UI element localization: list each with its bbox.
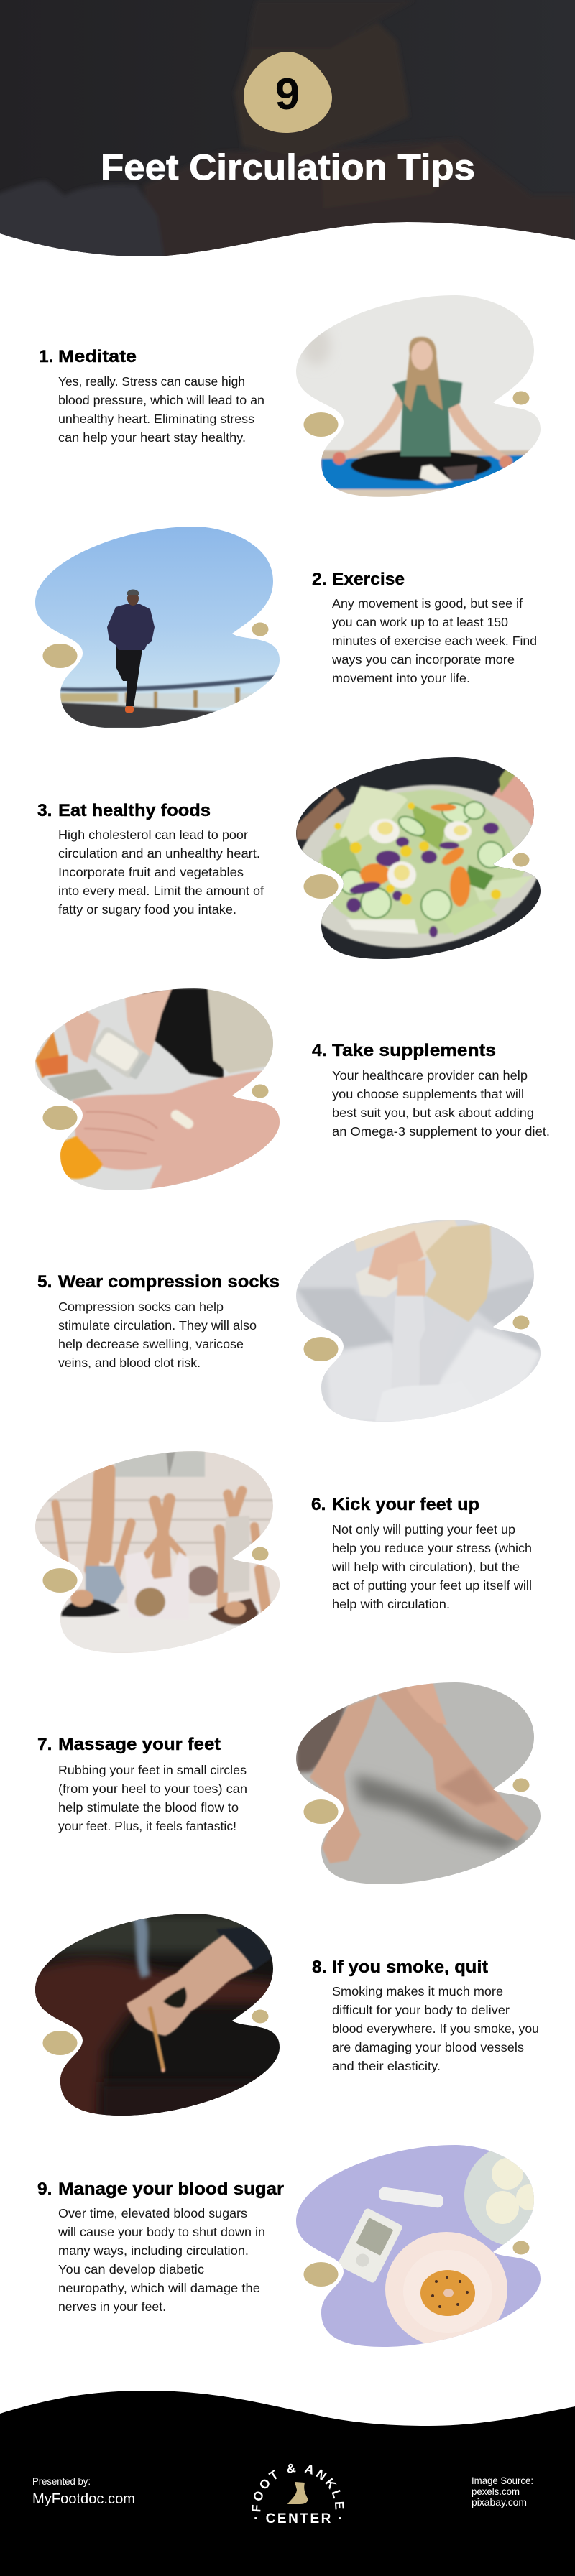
text block xyxy=(58,2206,265,2314)
heading: Massage your feet xyxy=(58,1735,221,1754)
text block: can help your heart stay healthy. xyxy=(58,430,246,445)
header photo: hands massaging a foot xyxy=(0,0,575,266)
text block: into every meal. Limit the amount of xyxy=(58,884,264,898)
text block: an Omega-3 supplement to your diet. xyxy=(332,1124,550,1139)
heading: 1. xyxy=(39,347,53,366)
logo: foot and ankle center: · CENTER · xyxy=(254,2511,343,2526)
text block xyxy=(332,1984,539,2073)
footer xyxy=(0,2391,575,2576)
text block: stimulate circulation. They will also xyxy=(58,1318,257,1333)
text block: you choose supplements that will xyxy=(332,1087,524,1101)
tan blob accents xyxy=(43,1547,269,1593)
header banner xyxy=(0,0,575,266)
panel: tip 7 massage your feet xyxy=(37,1682,540,1884)
panel: tip 5 wear compression socks xyxy=(37,1220,540,1422)
text block: You can develop diabetic xyxy=(58,2262,204,2276)
text block: help stimulate the blood flow to xyxy=(58,1800,239,1815)
text block: you can work up to at least 150 xyxy=(332,615,508,629)
text block: fatty or sugary food you intake. xyxy=(58,902,236,917)
heading: 8. xyxy=(312,1958,326,1977)
photo: socks on a bed xyxy=(296,1220,540,1422)
text block: best suit you, but ask about adding xyxy=(332,1106,534,1120)
presented by xyxy=(32,2476,135,2507)
heading: Take supplements xyxy=(332,1041,496,1060)
presented by: Presented by: xyxy=(32,2476,91,2487)
text block: help you reduce your stress (which xyxy=(332,1541,532,1555)
text block: Not only will putting your feet up xyxy=(332,1522,515,1537)
tan blob accents xyxy=(303,853,529,899)
image source: pixabay.com xyxy=(472,2497,527,2508)
tan blob accents xyxy=(43,2010,269,2055)
logo: foot and ankle center: FOOT & ANKLE xyxy=(252,2464,344,2511)
text block: many ways, including circulation. xyxy=(58,2243,249,2258)
heading: Eat healthy foods xyxy=(58,801,211,820)
text block xyxy=(58,374,264,445)
panel: tip 9 manage your blood sugar xyxy=(37,2144,566,2347)
text block: Incorporate fruit and vegetables xyxy=(58,865,244,879)
badge: number 9 xyxy=(244,52,332,133)
text block: Yes, really. Stress can cause high xyxy=(58,374,245,389)
text block: help decrease swelling, varicose xyxy=(58,1337,244,1351)
tan blob accents xyxy=(303,391,529,437)
photo: salad plate xyxy=(296,757,540,959)
text block xyxy=(58,1299,257,1370)
text block xyxy=(331,596,537,685)
photo: hand holding a cigarette xyxy=(28,1914,280,2122)
heading: 7. xyxy=(37,1735,52,1754)
text block xyxy=(331,1522,532,1611)
image source: Image Source: xyxy=(472,2475,533,2486)
photo: woman meditating xyxy=(296,295,540,497)
text block: help with circulation. xyxy=(332,1597,450,1611)
tan blob accents xyxy=(303,2241,529,2287)
presented by: MyFootdoc.com xyxy=(32,2491,135,2507)
panel: tip 4 take supplements xyxy=(35,988,550,1190)
image source xyxy=(472,2475,533,2508)
footer background wave xyxy=(0,2391,575,2576)
text block: Over time, elevated blood sugars xyxy=(58,2206,247,2220)
panel: tip 3 eat healthy foods xyxy=(37,757,552,963)
heading: 3. xyxy=(37,801,52,820)
heading: Meditate xyxy=(58,347,137,366)
photo: three women with legs up xyxy=(35,1451,280,1653)
heading: 5. xyxy=(37,1272,52,1292)
text block: will help with circulation), but the xyxy=(331,1560,520,1574)
photo: pill in an open hand xyxy=(35,988,283,1190)
heading: Kick your feet up xyxy=(332,1495,479,1514)
panel: tip 6 kick your feet up xyxy=(35,1451,532,1653)
text block xyxy=(332,1068,550,1139)
photo: bare feet on grey floor xyxy=(296,1682,540,1884)
heading: 6. xyxy=(311,1495,326,1514)
icon: foot xyxy=(288,2482,308,2504)
text block: minutes of exercise each week. Find xyxy=(332,634,537,648)
heading: 9. xyxy=(37,2179,52,2199)
image source: pexels.com xyxy=(472,2486,520,2497)
heading: Exercise xyxy=(332,570,405,589)
text block: veins, and blood clot risk. xyxy=(58,1356,201,1370)
text block: act of putting your feet up itself will xyxy=(332,1578,532,1593)
photo: man running xyxy=(35,527,280,728)
badge: number 9: 9 xyxy=(275,70,300,119)
heading: Manage your blood sugar xyxy=(58,2179,284,2199)
panel: tip 2 exercise xyxy=(35,527,537,728)
text block xyxy=(58,1763,247,1833)
heading: If you smoke, quit xyxy=(332,1958,488,1977)
text block: Compression socks can help xyxy=(58,1299,224,1314)
text block: are damaging your blood vessels xyxy=(332,2040,524,2054)
text block: blood everywhere. If you smoke, you xyxy=(332,2021,539,2036)
text block: ways you can incorporate more xyxy=(331,652,515,667)
text block: movement into your life. xyxy=(332,671,470,685)
tan blob accents xyxy=(303,1316,529,1361)
text block: High cholesterol can lead to poor xyxy=(58,828,248,842)
text block: blood pressure, which will lead to an xyxy=(58,393,264,407)
text block: your feet. Plus, it feels fantastic! xyxy=(58,1819,236,1833)
heading: Wear compression socks xyxy=(58,1272,280,1292)
text block: difficult for your body to deliver xyxy=(332,2003,510,2017)
tan blob accents xyxy=(303,1779,529,1824)
text block: Your healthcare provider can help xyxy=(332,1068,528,1083)
text block: Any movement is good, but see if xyxy=(332,596,523,611)
panel: tip 1 meditate xyxy=(39,295,540,497)
text block: unhealthy heart. Eliminating stress xyxy=(58,412,254,426)
text block: circulation and an unhealthy heart. xyxy=(58,846,260,861)
text block: will cause your body to shut down in xyxy=(58,2225,265,2239)
photo: glucose meter and doughnut xyxy=(296,2144,566,2347)
panel: tip 8 if you smoke, quit xyxy=(28,1914,539,2122)
text block: (from your heel to your toes) can xyxy=(58,1782,247,1796)
text block: nerves in your feet. xyxy=(58,2299,166,2314)
text block: and their elasticity. xyxy=(332,2059,441,2073)
heading: 4. xyxy=(312,1041,326,1060)
text block: Smoking makes it much more xyxy=(332,1984,503,1998)
text block: neuropathy, which will damage the xyxy=(58,2281,260,2295)
tan blob accents xyxy=(43,622,269,668)
heading: 2. xyxy=(312,570,326,589)
text block xyxy=(58,828,264,917)
text block: Rubbing your feet in small circles xyxy=(58,1763,247,1777)
title: Feet Circulation Tips xyxy=(101,147,475,187)
tan blob accents xyxy=(43,1085,269,1130)
